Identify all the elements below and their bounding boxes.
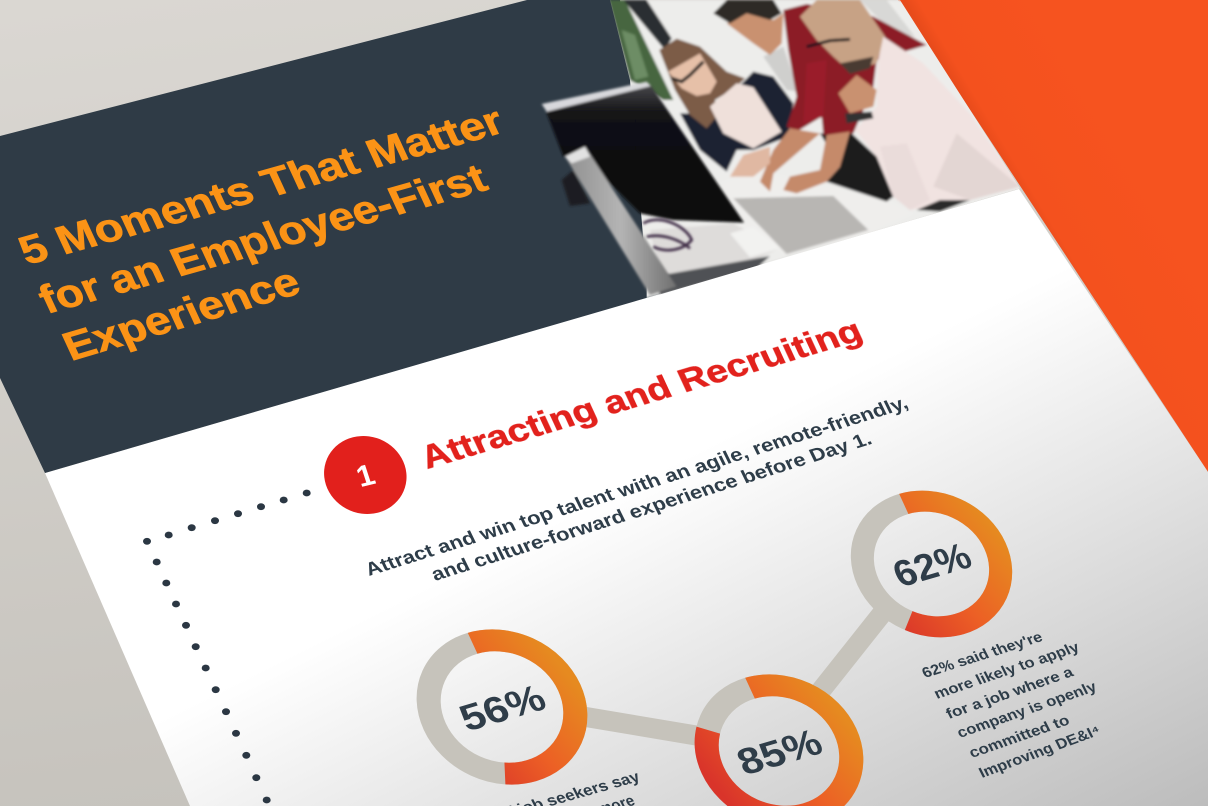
caption for 62%: for a job where a — [943, 664, 1077, 723]
step number badge: 1 — [352, 459, 379, 494]
orange backdrop panel — [898, 0, 1208, 472]
white page panel — [45, 189, 1208, 806]
connector between 56% and 85% — [580, 716, 705, 737]
section intro text: Attract and win top talent with an agile, remote-friendly, — [362, 393, 912, 580]
donut: 62%: 62% — [887, 536, 978, 596]
section heading: Attracting and Recruiting — [415, 313, 868, 476]
dark header panel — [0, 0, 660, 473]
donut: 62% — [840, 485, 1023, 643]
section intro text: and culture-forward experience before Day 1. — [428, 429, 876, 585]
caption for 62%: committed to — [966, 712, 1073, 762]
caption for 62%: 62% said they're — [919, 629, 1046, 682]
title: 5 Moments That Matter — [11, 98, 510, 273]
donut: 85% — [684, 669, 874, 806]
donut: 85%: 85% — [731, 722, 829, 784]
title — [11, 98, 510, 369]
dotted timeline path — [143, 490, 311, 803]
caption for 62%: Improving DE&I⁴ — [976, 722, 1103, 782]
caption for 62%: company is openly — [954, 678, 1100, 742]
donut: 56%: 56% — [453, 678, 552, 740]
photo: three colleagues at a desk — [542, 0, 1023, 300]
title: for an Employee-First — [31, 155, 494, 322]
connector between 85% and 62% — [815, 606, 888, 698]
caption for 62% — [919, 629, 1103, 782]
caption for 62%: more likely to apply — [931, 639, 1083, 703]
step number badge — [314, 427, 417, 523]
donut: 56% — [405, 624, 599, 790]
title: Experience — [56, 259, 307, 369]
